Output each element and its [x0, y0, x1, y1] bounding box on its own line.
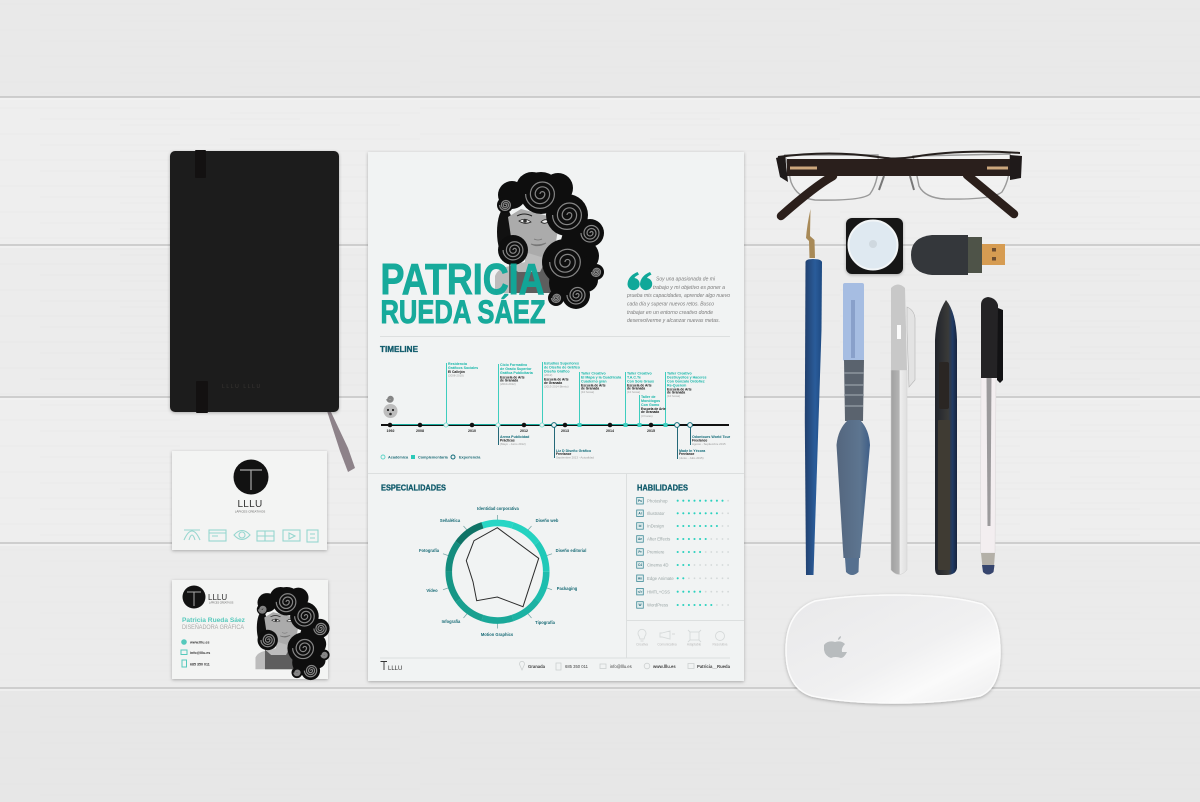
entry: taller el mapa: El Mapa y la Cuadrícula — [581, 376, 622, 380]
entry: taller monologos — [641, 395, 666, 418]
logo tagline: LÁPICES CREATIVOS — [235, 510, 265, 514]
entry: odontours: Agosto - Septiembre 2015 — [692, 442, 726, 446]
skill icon glyphs: C4 — [638, 563, 642, 567]
year labels: 2013 — [561, 429, 569, 433]
logo tagline: LÁPICES CREATIVOS — [209, 602, 234, 604]
entry: odontours: Freelance — [692, 438, 708, 442]
entry: liz d diseno: Septiembre 2013 - Actualidad — [556, 456, 594, 460]
barrel — [891, 370, 907, 574]
radar labels: Motion Graphics — [481, 632, 514, 637]
top rim — [778, 152, 1020, 158]
timeline legend: Académica — [388, 456, 409, 460]
entry: estudios superiores: Diseño Gráfico — [544, 370, 570, 374]
milestone dots: complementary — [578, 423, 668, 427]
entry: taller destruyellos: Escuela de Arte — [667, 388, 692, 392]
temple tips — [781, 176, 833, 216]
hinges — [776, 155, 1022, 182]
skill names: After Effects — [647, 537, 670, 542]
entry: taller tac — [627, 372, 654, 394]
usb metal sleeve — [967, 237, 982, 273]
entry: taller el mapa: Escuela de Arte — [581, 384, 606, 388]
year labels: 2008 — [416, 429, 424, 433]
timeline legend — [381, 455, 481, 460]
footer logo — [380, 662, 402, 672]
entry: residencia — [448, 362, 478, 378]
entry: residencia: Gráficos Sociales — [448, 366, 478, 370]
footer logo: LLLU — [388, 666, 402, 672]
ink bottle — [846, 218, 903, 274]
entry: estudios superiores: de Diseño de Gráfico — [544, 366, 581, 370]
ballpoint pen — [980, 297, 1003, 574]
footer text: Granada — [528, 664, 546, 669]
entry: estudios superiores: Estudios Superiores — [544, 362, 579, 366]
radar labels: Diseño web — [536, 518, 559, 523]
radar labels: Diseño editorial — [556, 548, 586, 553]
timeline legend: Complementaria — [418, 456, 449, 460]
clear cap — [891, 284, 907, 370]
footer contact bar — [380, 661, 731, 672]
entry: ciclo formativo: Escuela de Arte — [500, 376, 525, 380]
radar labels: Packaging — [557, 586, 578, 591]
contact rows — [181, 639, 210, 667]
name: Patricia Rueda Sáez — [182, 618, 245, 624]
entry: taller monologos: (3 horas) — [641, 414, 653, 418]
skill icon glyphs: W — [638, 603, 642, 607]
entry: taller tac: Taller Creativo — [627, 372, 653, 376]
entry: taller destruyellos: Re-Querem — [667, 384, 686, 388]
sheet background — [368, 152, 744, 681]
skill names: Edge Animate — [647, 576, 674, 581]
ribbon bookmark — [327, 411, 355, 472]
entry: arena publicidad — [500, 435, 529, 446]
skill icon glyphs: Pr — [638, 550, 642, 554]
timeline legend: Experiencia — [459, 456, 481, 460]
logo circle — [234, 460, 268, 494]
body — [836, 420, 870, 558]
silver pen — [891, 284, 915, 574]
radar chart: specialties — [419, 504, 586, 640]
entry: taller monologos: de Granada — [641, 410, 659, 414]
radar labels: Fotografía — [419, 548, 440, 553]
radar labels: Vídeo — [426, 588, 438, 593]
entry: taller tac: Con Sole Graus — [627, 380, 654, 384]
radar ring — [429, 504, 566, 640]
logo circle — [182, 586, 206, 608]
rating dots: filled — [678, 501, 723, 605]
entry: ciclo formativo — [500, 363, 534, 386]
entry: arena publicidad: (Mayo - Junio 2012) — [500, 442, 526, 446]
footer text — [528, 664, 731, 669]
radar labels: Infografía — [442, 619, 461, 624]
entry: taller monologos: Con Gomo — [641, 403, 660, 407]
tan inlays — [790, 166, 1008, 170]
skill names: Cinema 4D — [647, 563, 668, 568]
title: name: PATRICIA — [380, 255, 544, 304]
entry: made in yecora: (Junio - Julio 2015) — [679, 456, 704, 460]
entry: estudios superiores: de Granada — [544, 381, 562, 385]
skill icon glyphs: Ai — [638, 512, 642, 516]
entry: taller tac: (10 horas) — [627, 390, 640, 394]
end plug and tip — [981, 553, 995, 574]
vertical markers — [446, 362, 666, 425]
intro statement: desenvolverme y alcanzar nuevas metas. — [627, 318, 720, 324]
entry: estudios superiores: (2013-2014 Bienio) — [544, 384, 569, 388]
skill icon glyphs: Ps — [638, 499, 642, 503]
entry: taller destruyellos: de Granada — [667, 390, 685, 394]
entry: arena publicidad: Arena Publicidad — [500, 435, 529, 439]
entry: residencia: (2008-2010) — [448, 374, 464, 378]
milestone dots: years — [388, 423, 653, 427]
skill names: Illustrator — [647, 511, 665, 516]
skill icon glyphs — [638, 499, 642, 607]
skill names — [647, 498, 674, 608]
entry: taller destruyellos: Taller Creativo — [667, 372, 693, 376]
skill icon glyphs: Ae — [638, 537, 642, 541]
clip — [907, 307, 915, 387]
personal qualities: Adaptable — [687, 642, 701, 646]
intro statement — [626, 276, 730, 324]
digital stylus — [935, 300, 957, 575]
skill icon glyphs: </> — [638, 590, 642, 594]
entry: liz d diseno — [556, 449, 594, 460]
business card: front with logo and icons — [172, 451, 327, 550]
skill names: WordPress — [647, 603, 668, 608]
entry: taller el mapa: (10 horas) — [581, 390, 594, 394]
entry: taller el mapa: Taller Creativo — [581, 372, 607, 376]
portrait illustration — [495, 172, 604, 309]
skill names: HMTL+CSS — [647, 589, 670, 594]
dip pen — [805, 209, 822, 575]
entry: taller destruyellos: (10 horas) — [667, 394, 680, 398]
intro statement: Soy una apasionada de mi — [656, 276, 716, 282]
entry: residencia: Residencia — [448, 362, 468, 366]
entry: taller tac: T.A.C.Te — [627, 376, 641, 380]
portrait illustration — [255, 587, 330, 680]
barrel — [980, 376, 996, 553]
entry: taller monologos: Taller de — [641, 395, 656, 399]
entry: taller destruyellos: Con Gonzalo Ordoñez — [667, 380, 705, 384]
heading: habilidades: HABILIDADES — [637, 482, 688, 492]
entry: taller monologos: Escuela de Arte — [641, 407, 666, 411]
radar value polygon — [466, 528, 539, 607]
intro statement: trabajo y mi objetivo es poner a — [653, 285, 725, 291]
year labels: 2012 — [520, 429, 528, 433]
quality icons — [638, 629, 724, 642]
resume sheet — [368, 152, 744, 681]
radar labels: Señalética — [440, 518, 461, 523]
grip — [844, 360, 864, 421]
skill names: Premiere — [647, 550, 665, 555]
entry: ciclo formativo: (2010-2012) — [500, 382, 516, 386]
year labels: 1992 — [386, 429, 394, 433]
heading: timeline: TIMELINE — [380, 344, 418, 354]
tip — [845, 558, 859, 575]
entry: estudios superiores: (2012) — [544, 373, 552, 377]
entry: ciclo formativo: de Granada — [500, 378, 518, 382]
glasses — [776, 152, 1022, 216]
nib — [806, 209, 815, 258]
skill names: InDesign — [647, 524, 665, 529]
radar labels — [419, 506, 586, 637]
entry: made in yecora — [679, 449, 706, 460]
timeline chart — [381, 362, 731, 460]
title: name: RUEDA SÁEZ — [380, 294, 546, 330]
usb body — [911, 235, 968, 275]
entry: estudios superiores: Escuela de Arte — [544, 378, 569, 382]
logo wordmark: LLLU — [208, 593, 227, 602]
job title: DISEÑADORA GRÁFICA — [182, 624, 244, 631]
cap — [843, 283, 864, 361]
entry: taller monologos: Monólogos — [641, 399, 660, 403]
entry: made in yecora: Made In Yécora — [679, 449, 706, 453]
entry: taller el mapa: Cuaderno gran — [581, 380, 607, 384]
entry: liz d diseno: Freelance — [556, 452, 572, 456]
entry: ciclo formativo: Ciclo Formativo — [500, 363, 528, 367]
entry: taller destruyellos — [667, 372, 707, 398]
skill icon glyphs: Id — [639, 524, 641, 528]
skill icon glyphs: An — [638, 576, 642, 580]
radar labels: Tipografía — [535, 620, 556, 625]
entry: liz d diseno: Liz D Diseño Gráfico — [556, 449, 592, 453]
brush pen — [836, 283, 870, 575]
contact rows: info@lllu.es — [190, 651, 210, 655]
entry: arena publicidad: Prácticas — [500, 438, 515, 442]
entry: residencia: El Callejón — [448, 370, 465, 374]
heading: especialidades: ESPECIALIDADES — [381, 482, 446, 492]
elastic band — [195, 150, 208, 413]
personal qualities: Resolutiva — [713, 642, 728, 646]
entry: odontours: Odontours World Tour — [692, 435, 731, 439]
rating dots: empty — [678, 501, 731, 605]
footer text: 685 350 011 — [565, 664, 589, 669]
folded temple bars and bridge — [787, 159, 1010, 176]
holder — [805, 259, 822, 575]
contact rows: 685 350 011 — [190, 662, 210, 666]
black notebook with ribbon bookmark — [170, 150, 355, 472]
business card: back with portrait and contact details — [172, 580, 330, 680]
cap — [981, 297, 999, 378]
entry: estudios superiores — [544, 362, 581, 388]
intro statement: cada día y superar nuevos retos. Busco — [627, 302, 714, 308]
embossed brand: LLLU LLLU — [222, 384, 262, 390]
radar ticks — [443, 515, 552, 628]
service icons — [184, 530, 318, 542]
intro statement: prueba mis capacidades, aprender algo nuevo — [626, 293, 730, 299]
logo wordmark: LLLU — [237, 499, 263, 510]
nose pads — [879, 176, 914, 190]
entry: odontours — [692, 435, 731, 446]
entry: taller tac: Escuela de Arte — [627, 384, 652, 388]
personal qualities — [636, 629, 728, 646]
usb connector — [982, 244, 1005, 265]
axis — [381, 424, 729, 426]
year labels: 2015 — [647, 429, 655, 433]
magic mouse — [786, 595, 1000, 703]
entry: taller destruyellos: Destruyellos y Haceres — [667, 376, 707, 380]
entry: taller el mapa — [581, 372, 622, 394]
contact rows: www.lllu.es — [189, 640, 209, 644]
entry: ciclo formativo: Gráfica Publicitaria — [500, 371, 534, 375]
skill names: Photoshop — [647, 498, 668, 503]
entry: taller tac: de Granada — [627, 386, 645, 390]
intro statement: trabajar en un entorno creativo donde — [627, 310, 713, 316]
notebook cover — [170, 151, 339, 412]
entry: ciclo formativo: de Grado Superior — [500, 367, 532, 371]
footer text: info@lllu.es — [610, 664, 632, 669]
milestone dots: studies — [444, 423, 544, 427]
title: name — [380, 255, 546, 330]
radar labels: Identidad corporativa — [477, 506, 520, 511]
year labels — [386, 429, 655, 433]
year labels: 2014 — [606, 429, 614, 433]
year labels: 2010 — [468, 429, 476, 433]
skills list with rating dots — [637, 498, 731, 608]
usb drive — [911, 235, 1005, 275]
lens frames — [785, 155, 878, 200]
footer text: Patricia__Rueda — [697, 664, 731, 669]
quality labels: Creativa — [636, 642, 648, 646]
personal qualities: Comunicativa — [657, 642, 677, 646]
icon: apple logo — [824, 636, 847, 658]
footer text: www.lllu.es — [652, 664, 676, 669]
icon: quotation marks — [627, 272, 652, 290]
entry: made in yecora: Freelance — [679, 452, 695, 456]
entry: taller el mapa: de Granada — [581, 386, 599, 390]
icon: baby figure — [384, 396, 398, 418]
footer icons — [520, 661, 694, 670]
skill icons — [637, 498, 643, 608]
milestone dots: experience — [552, 423, 692, 427]
